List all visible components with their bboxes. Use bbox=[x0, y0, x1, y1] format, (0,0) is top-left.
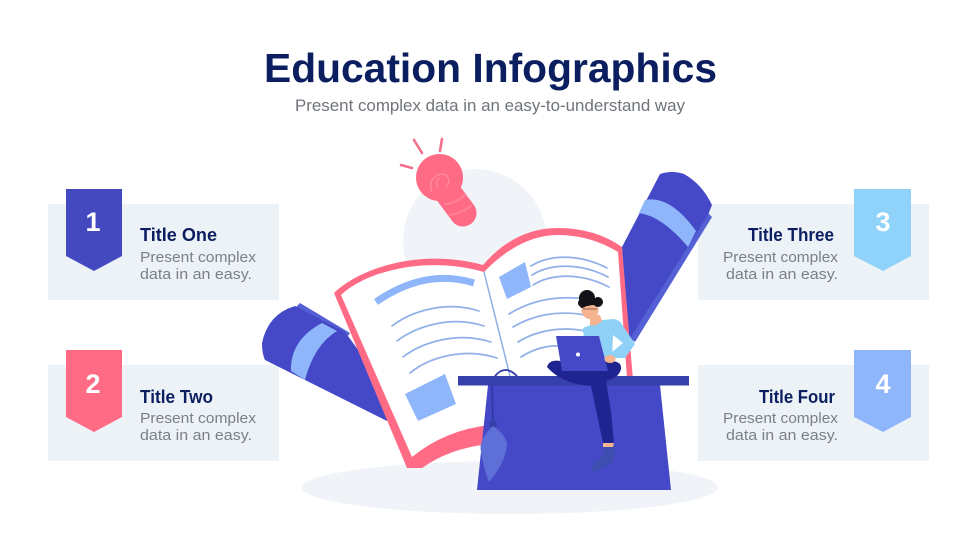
icon: rolled book left bbox=[262, 303, 395, 421]
neck bbox=[590, 315, 602, 326]
laptop bbox=[556, 336, 608, 371]
ribbon: number 1: 1 bbox=[85, 207, 101, 237]
shoe bbox=[591, 447, 615, 472]
glasses bbox=[583, 308, 597, 310]
foot bbox=[603, 443, 614, 447]
ribbon: number 3: 3 bbox=[875, 207, 891, 237]
body text: title two: Present complex bbox=[140, 410, 257, 427]
subtitle: Present complex data in an easy-to-understand way bbox=[295, 96, 685, 115]
body text: title two bbox=[140, 410, 257, 444]
icon: light bulb bbox=[401, 139, 472, 215]
heading: title three: Title Three bbox=[748, 225, 834, 245]
cap tassel cord loop bbox=[495, 370, 517, 376]
ribbon: number 3 bbox=[854, 189, 911, 271]
panel: title two bbox=[48, 350, 279, 461]
icon: rolled book right bbox=[622, 172, 712, 345]
left page picture bbox=[405, 374, 456, 421]
spine line bbox=[484, 272, 510, 376]
body text: title three bbox=[723, 249, 839, 283]
ribbon: number 1 bbox=[66, 189, 122, 271]
body text: title four: Present complex bbox=[723, 410, 839, 427]
ribbon: number 4: 4 bbox=[875, 369, 891, 399]
ribbon: number 2 bbox=[66, 350, 122, 432]
title: Education Infographics bbox=[264, 45, 717, 91]
body text: title four bbox=[723, 410, 839, 444]
heading: title four: Title Four bbox=[759, 387, 835, 407]
hand bbox=[604, 355, 616, 363]
left page text lines bbox=[376, 278, 497, 373]
icon: tassel bbox=[480, 385, 507, 482]
heading: title two: Title Two bbox=[140, 387, 213, 407]
face bbox=[582, 301, 598, 319]
right page text lines bbox=[509, 257, 609, 357]
panel: title three bbox=[698, 189, 929, 300]
right page picture bbox=[499, 262, 531, 299]
panel: title one bbox=[48, 189, 279, 300]
background circle bbox=[403, 169, 547, 313]
ground shadow bbox=[302, 461, 718, 514]
person with laptop bbox=[547, 290, 635, 472]
graduation cap base bbox=[477, 385, 671, 490]
body text: title one: Present complex bbox=[140, 249, 257, 266]
graduation cap board bbox=[458, 376, 689, 386]
body text: title four: data in an easy. bbox=[726, 427, 838, 444]
legs bbox=[547, 361, 621, 443]
body text: title three: data in an easy. bbox=[726, 266, 838, 283]
body text: title one: data in an easy. bbox=[140, 266, 252, 283]
heading: title one: Title One bbox=[140, 225, 217, 245]
panel: title four bbox=[698, 350, 929, 461]
body text: title two: data in an easy. bbox=[140, 427, 252, 444]
icon: open book bbox=[334, 228, 633, 468]
ribbon: number 4 bbox=[854, 350, 911, 432]
body text: title one bbox=[140, 249, 257, 283]
torso bbox=[583, 319, 635, 362]
ribbon: number 2: 2 bbox=[85, 369, 101, 399]
hair bbox=[578, 290, 603, 308]
body text: title three: Present complex bbox=[723, 249, 839, 266]
